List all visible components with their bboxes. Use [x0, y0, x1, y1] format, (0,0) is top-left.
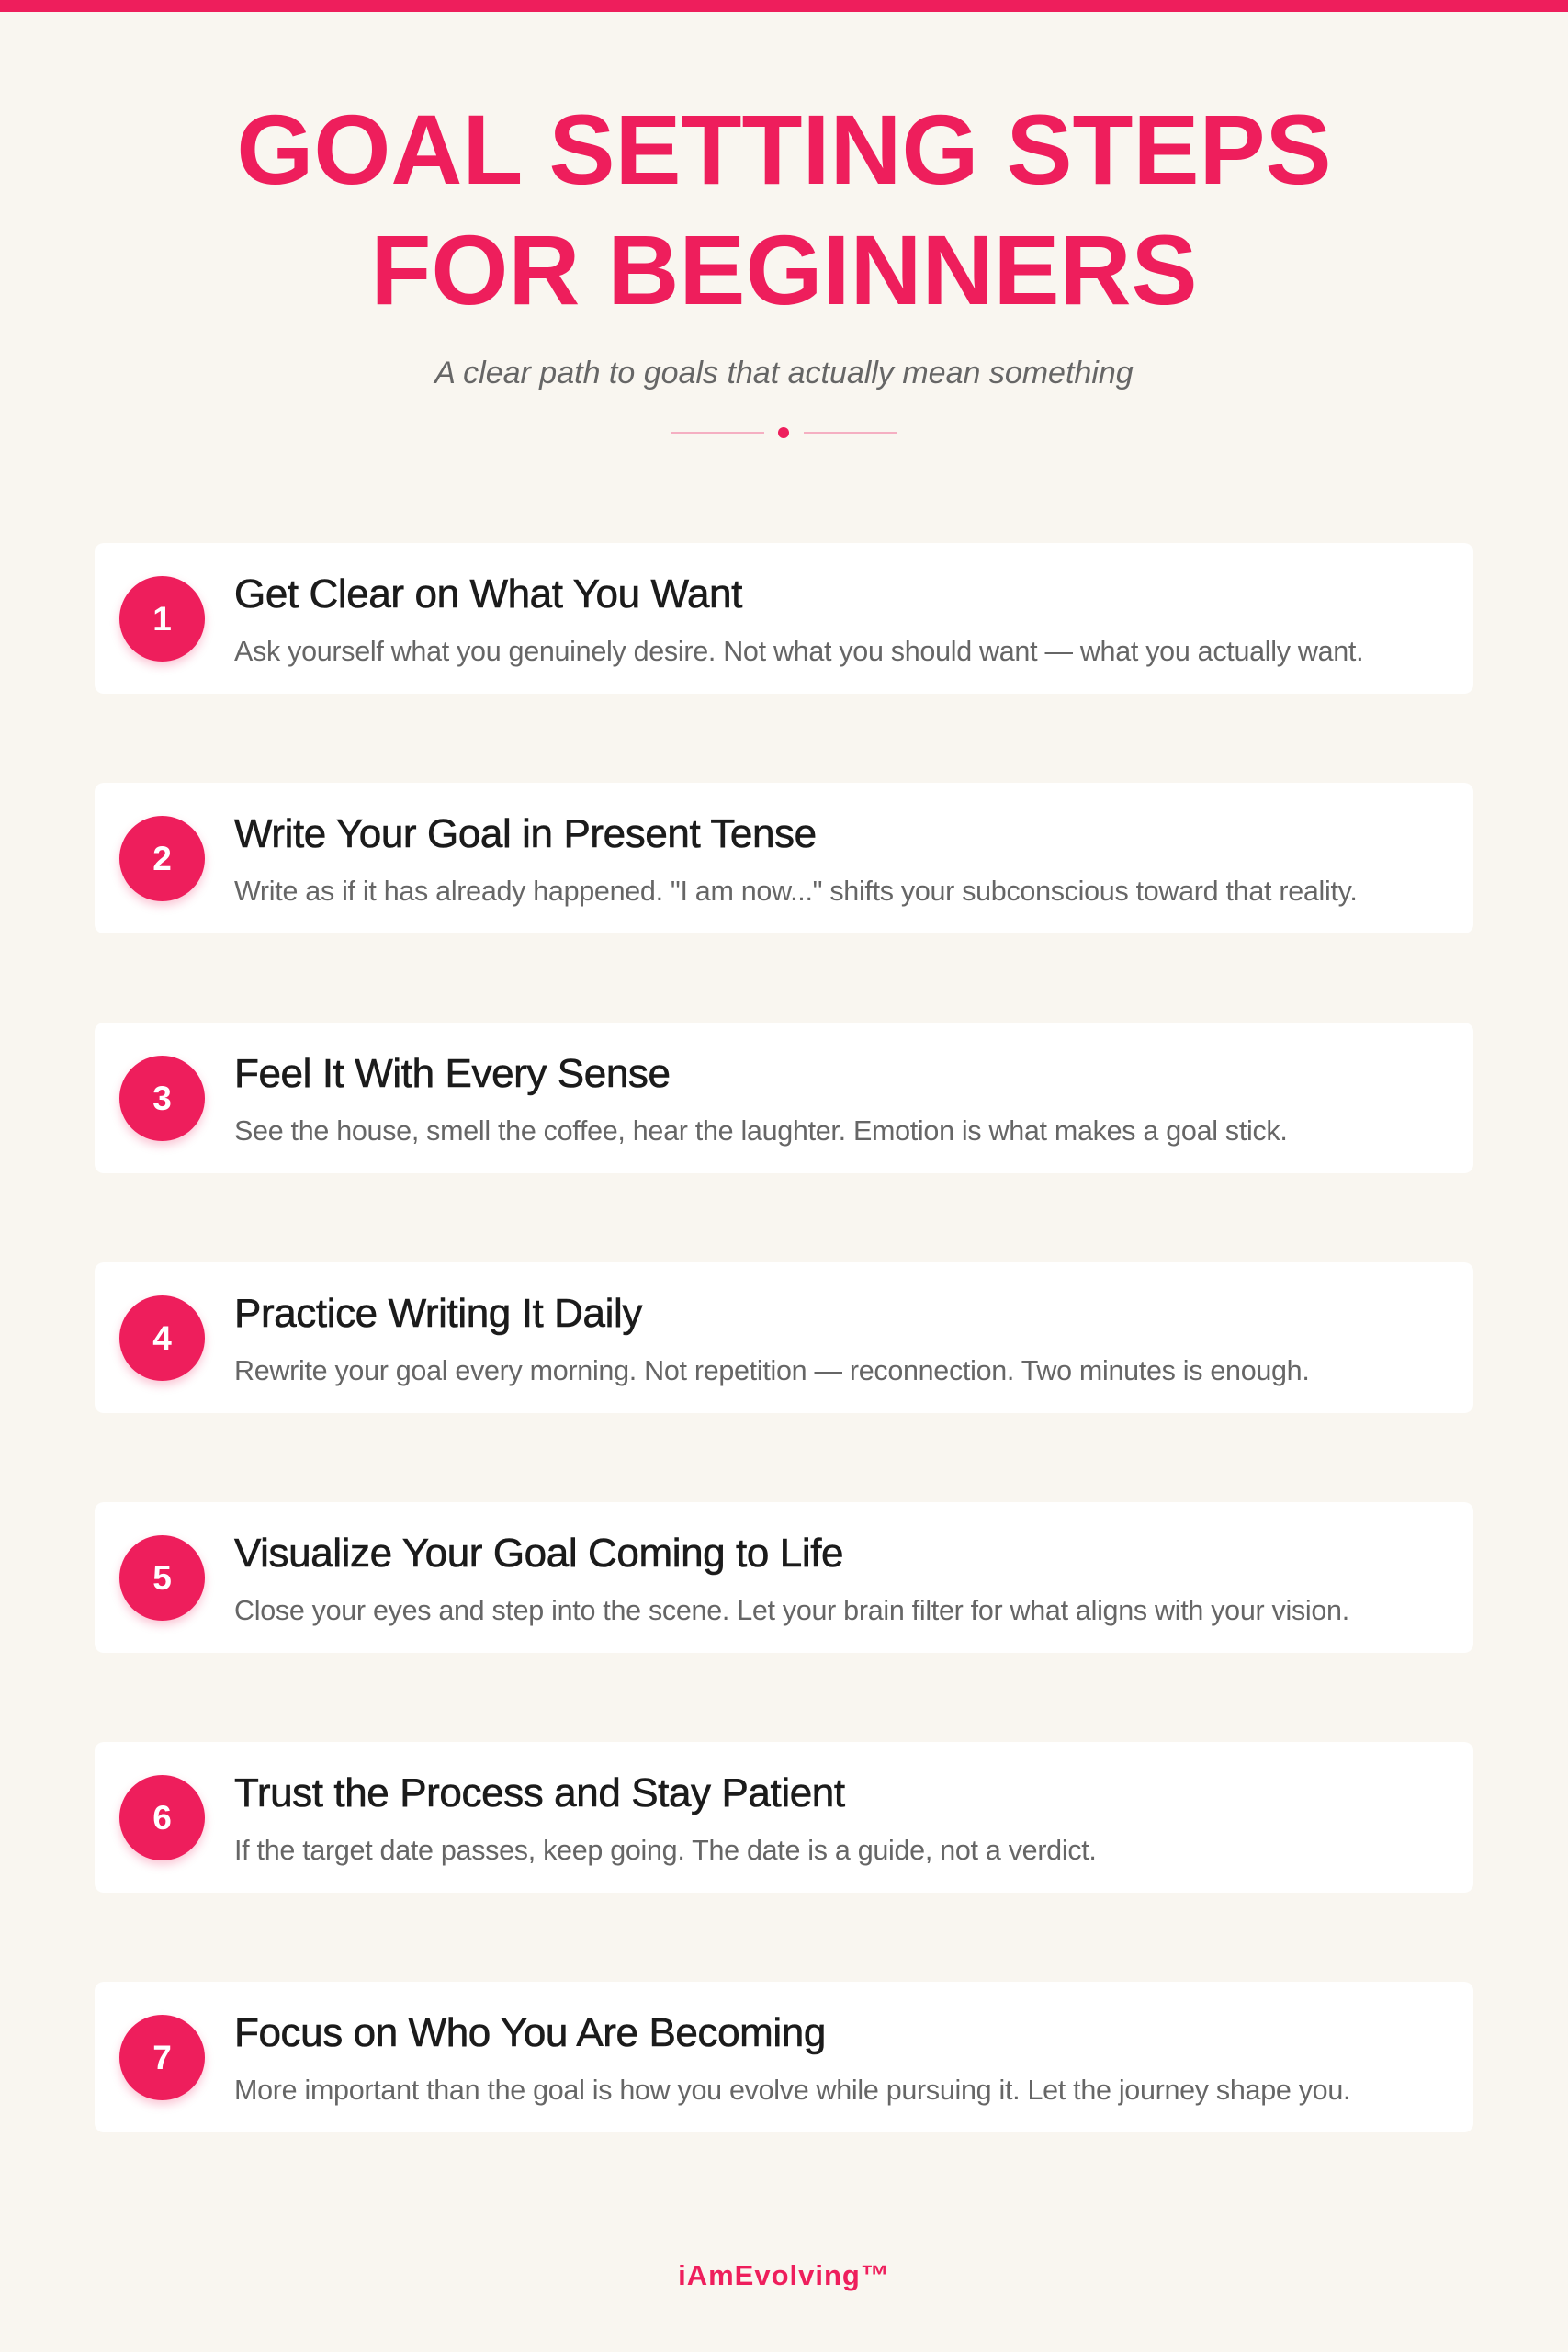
footer brand: iAmEvolving™: [678, 2259, 890, 2291]
badge 2: [119, 816, 205, 901]
title: GOAL SETTING STEPS: [236, 94, 1332, 205]
card 5: Close your eyes and step into the scene. Let your brain filter for what aligns with your vision.: [234, 1595, 1349, 1626]
card 2: [95, 783, 1473, 933]
badge 2: 2: [152, 840, 172, 877]
card 1: [95, 543, 1473, 694]
badge 5: [119, 1535, 205, 1621]
badge 1: [119, 576, 205, 662]
top bar: [0, 0, 1568, 12]
card 3: Feel It With Every Sense: [234, 1051, 671, 1096]
card 6: If the target date passes, keep going. The date is a guide, not a verdict.: [234, 1835, 1097, 1866]
card 4: [95, 1262, 1473, 1413]
card 1: Get Clear on What You Want: [234, 571, 742, 616]
card 6: [95, 1742, 1473, 1893]
title: FOR BEGINNERS: [370, 214, 1198, 325]
badge 6: 6: [152, 1799, 172, 1837]
badge 3: [119, 1056, 205, 1141]
divider: [671, 427, 897, 438]
card 7: [95, 1982, 1473, 2132]
badge 6: [119, 1775, 205, 1860]
card 3: [95, 1023, 1473, 1173]
subtitle: A clear path to goals that actually mean something: [434, 356, 1134, 390]
badge 7: 7: [152, 2039, 172, 2076]
card 2: Write Your Goal in Present Tense: [234, 811, 817, 856]
card 5: Visualize Your Goal Coming to Life: [234, 1531, 843, 1576]
badge 3: 3: [152, 1080, 172, 1117]
badge 4: [119, 1295, 205, 1381]
card 2: Write as if it has already happened. "I am now..." shifts your subconscious toward that reality.: [234, 876, 1358, 907]
badge 5: 5: [152, 1559, 172, 1597]
badge 1: 1: [152, 600, 172, 638]
card 6: Trust the Process and Stay Patient: [234, 1770, 845, 1815]
card 5: [95, 1502, 1473, 1653]
card 1: Ask yourself what you genuinely desire. Not what you should want — what you actually want.: [234, 636, 1363, 667]
badge 4: 4: [152, 1319, 172, 1357]
card 4: Rewrite your goal every morning. Not repetition — reconnection. Two minutes is enough.: [234, 1355, 1310, 1386]
card 4: Practice Writing It Daily: [234, 1291, 642, 1336]
title: [236, 94, 1332, 325]
card 7: Focus on Who You Are Becoming: [234, 2010, 826, 2055]
card 7: More important than the goal is how you evolve while pursuing it. Let the journey shape you.: [234, 2075, 1350, 2106]
badge 7: [119, 2015, 205, 2100]
card 3: See the house, smell the coffee, hear the laughter. Emotion is what makes a goal stick.: [234, 1115, 1288, 1147]
